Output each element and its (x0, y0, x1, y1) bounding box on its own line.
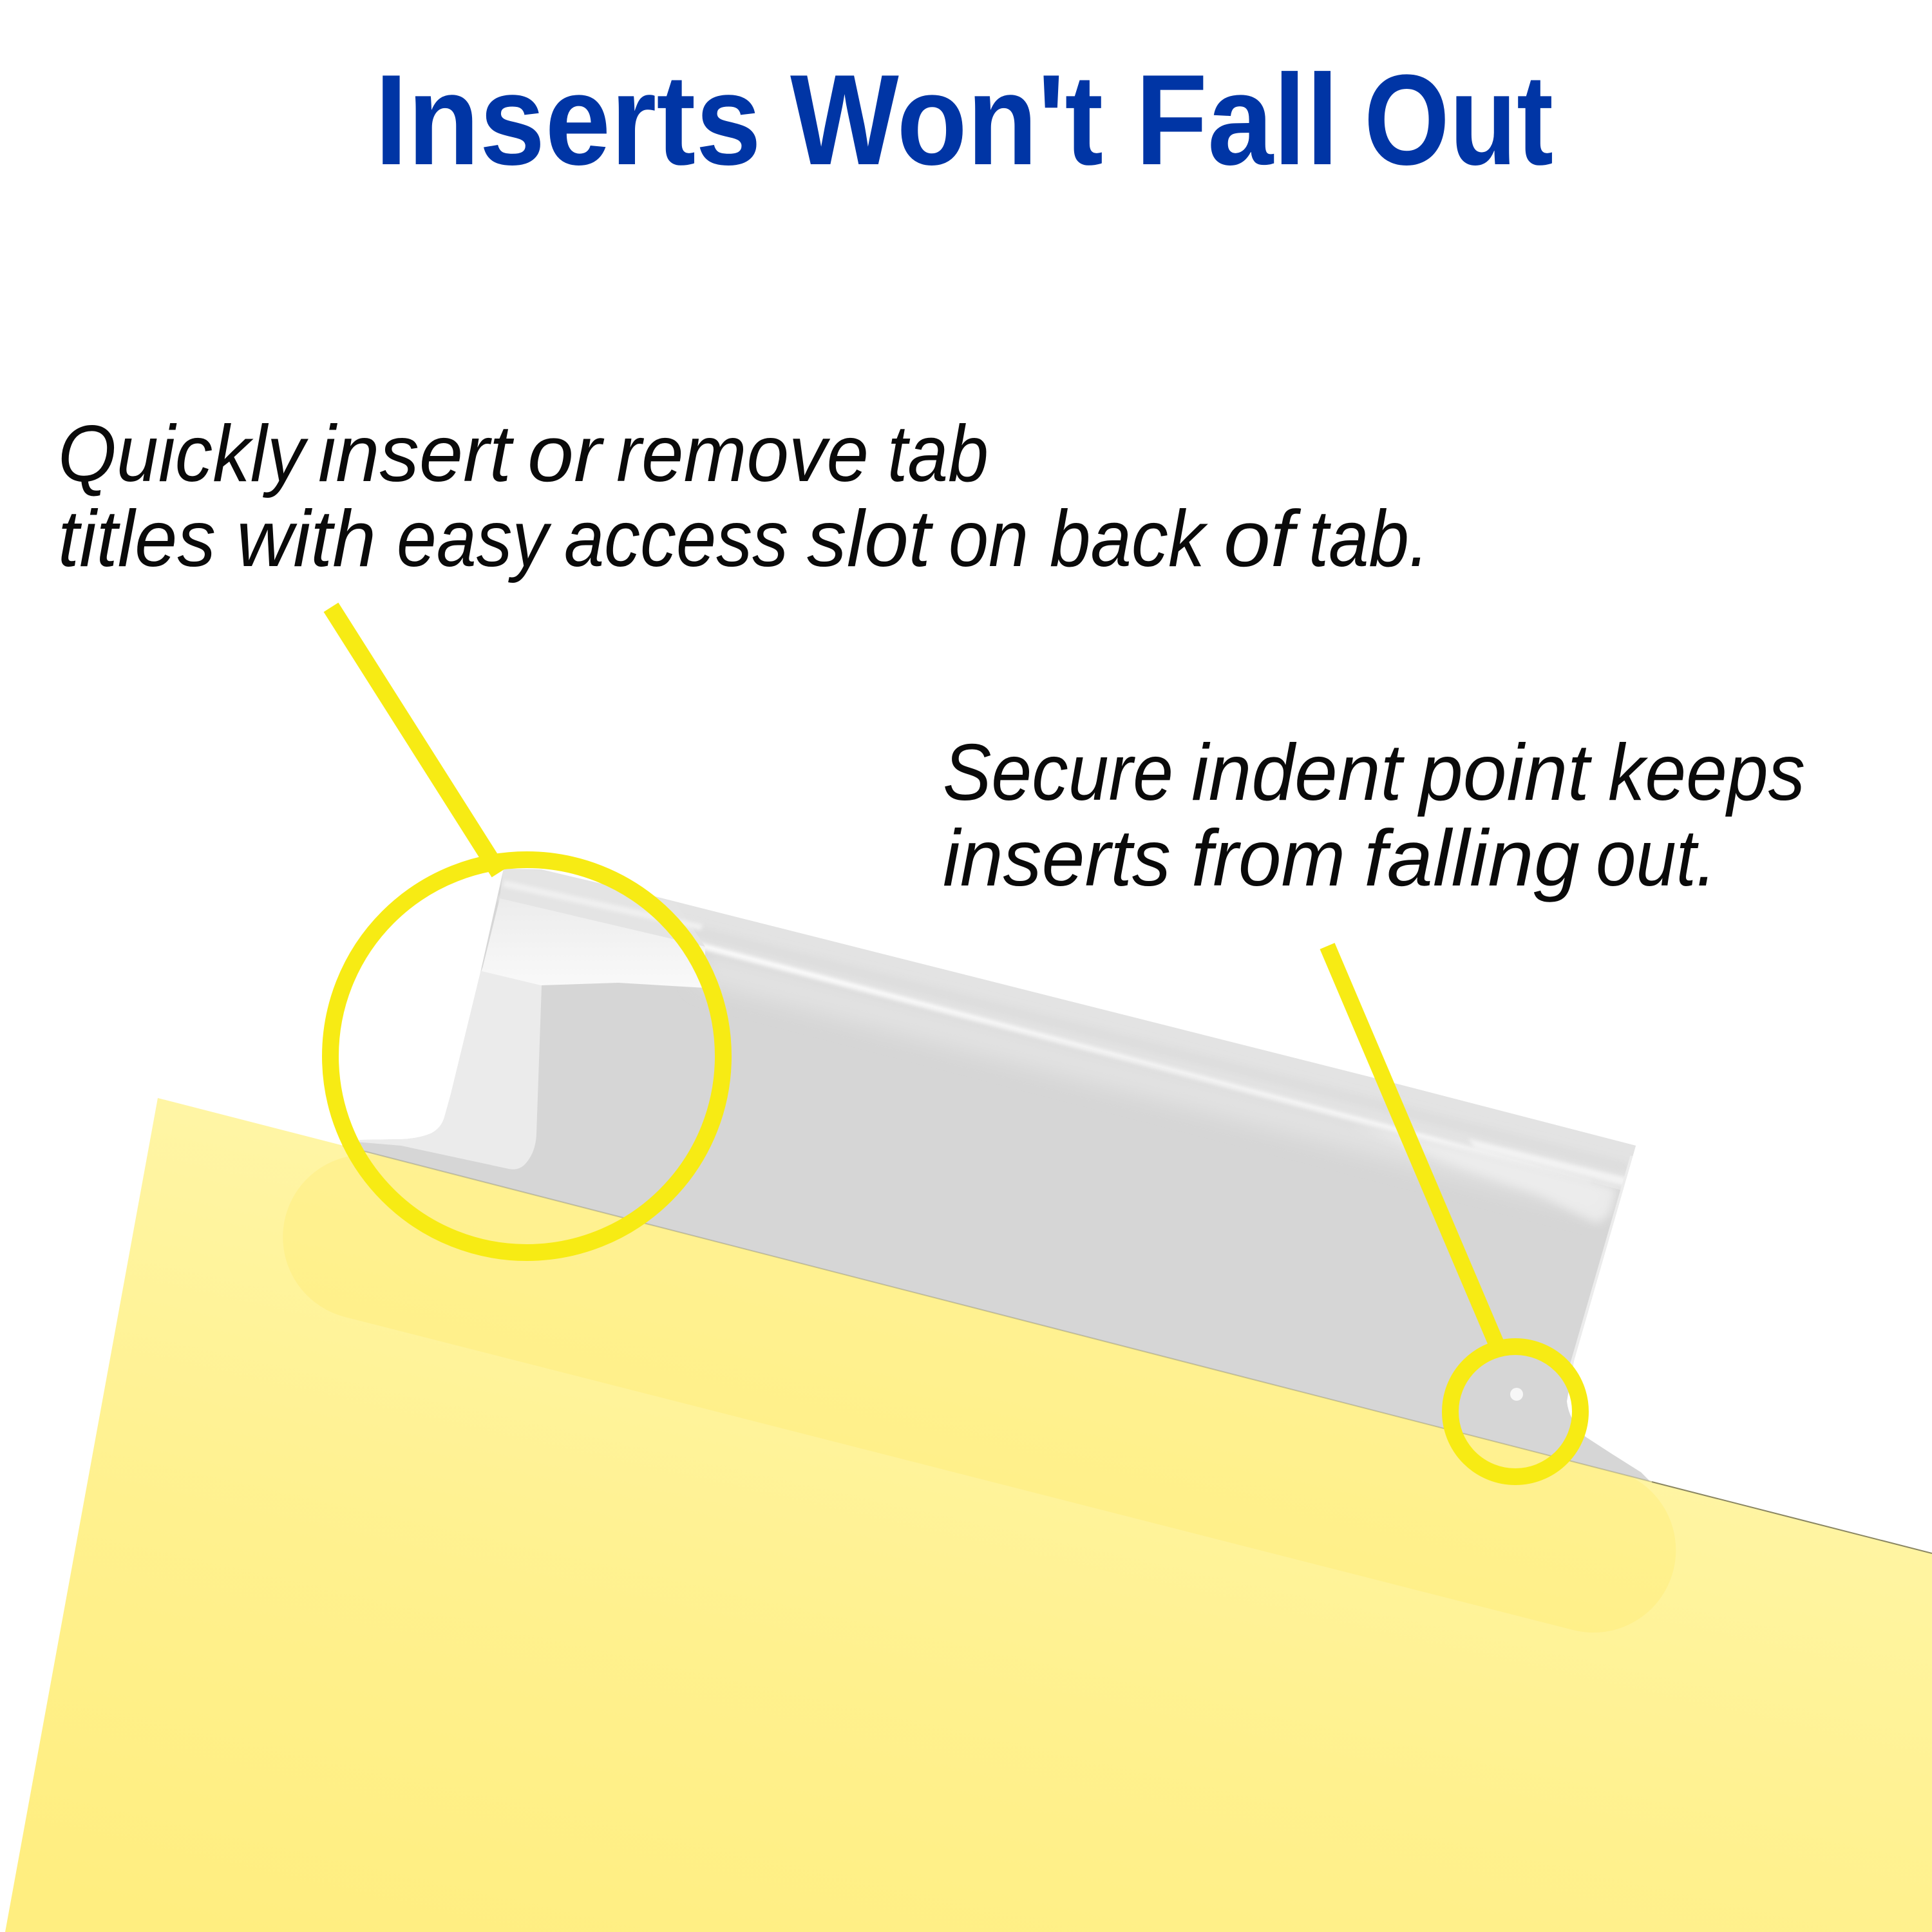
callout text: secure indent point: inserts (943, 814, 1171, 903)
callout text: easy access slot: on (949, 495, 1028, 583)
callout text: secure indent point: falling (1364, 814, 1580, 903)
folder edge shadow (1652, 1482, 1932, 1553)
callout text: secure indent point (943, 728, 1805, 903)
title (375, 48, 1553, 192)
leader line: indent point (1327, 946, 1497, 1346)
indent point (1510, 1388, 1523, 1401)
callout text: easy access slot: of (1224, 495, 1302, 583)
callout text: easy access slot: tab (887, 410, 989, 498)
title: Out (1364, 48, 1553, 192)
shine on right end (1399, 1137, 1615, 1222)
callout text: easy access slot: insert (318, 410, 515, 498)
right edge sheen (1571, 1156, 1632, 1365)
callout text: secure indent point: Secure (943, 728, 1173, 817)
light panel at left end of tab (359, 967, 542, 1170)
callout text: easy access slot: slot (807, 495, 934, 583)
title: Fall (1135, 48, 1339, 192)
callout text: secure indent point: out. (1596, 814, 1716, 903)
callout text: easy access slot: titles (58, 495, 216, 583)
highlight ring: access slot (330, 860, 723, 1253)
title: Inserts (375, 48, 761, 192)
tab base edge line (343, 1146, 1652, 1482)
callout text: easy access slot: tab. (1309, 495, 1429, 583)
adhesive strip on folder (265, 1137, 1694, 1651)
clear plastic tab (343, 866, 1932, 1553)
callout text: easy access slot: easy (397, 495, 552, 583)
callout text: easy access slot: access (564, 495, 788, 583)
yellow file folder (5, 1098, 1932, 1932)
callout text: easy access slot (58, 410, 1429, 583)
callout text: easy access slot: Quickly (58, 410, 309, 498)
callout text: easy access slot: remove (616, 410, 869, 498)
callout text: easy access slot: with (236, 495, 376, 583)
tab highlight line (498, 896, 1515, 1162)
highlight ring: indent point (1450, 1347, 1580, 1477)
leader line: access slot (331, 607, 499, 873)
callout text: secure indent point: point (1417, 728, 1592, 817)
callout text: secure indent point: from (1191, 814, 1345, 903)
callout text: easy access slot: back (1050, 495, 1209, 583)
tab top rail (500, 866, 1639, 1191)
title: Won't (790, 48, 1103, 192)
callout text: secure indent point: keeps (1608, 728, 1805, 817)
callout text: secure indent point: indent (1191, 728, 1405, 817)
callout text: easy access slot: or (527, 410, 605, 498)
shine wedge at left end (482, 898, 705, 988)
